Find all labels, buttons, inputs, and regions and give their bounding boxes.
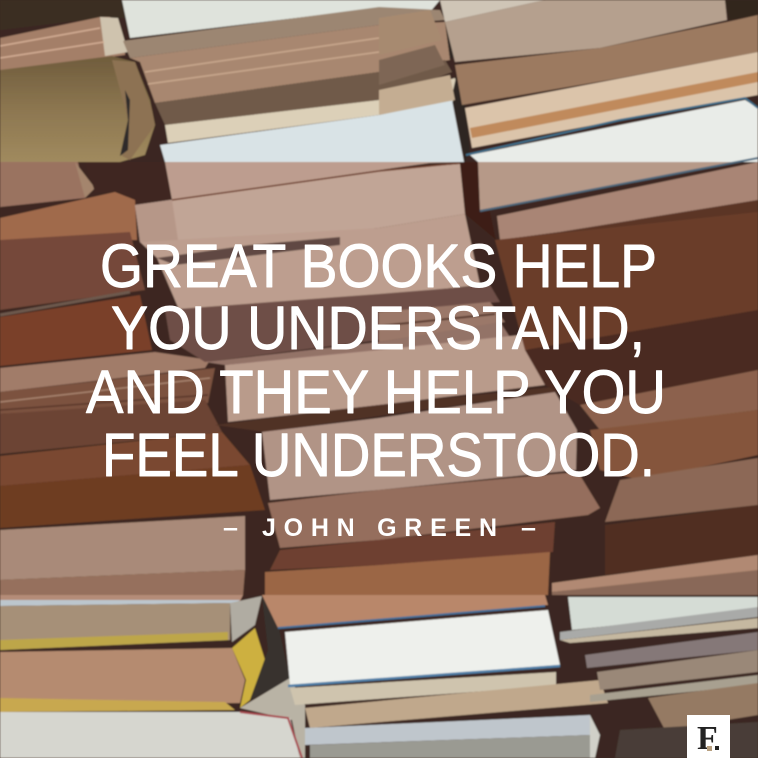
quote text	[86, 232, 666, 489]
top middle books	[122, 0, 470, 162]
attribution: JOHN GREEN	[262, 514, 497, 542]
attribution: –	[521, 514, 536, 542]
quote text: FEEL UNDERSTOOD.	[102, 421, 655, 489]
logo badge: F	[697, 720, 718, 757]
middle band left books	[0, 162, 265, 595]
middle band right books	[478, 158, 758, 595]
bottom left books	[0, 595, 305, 758]
top left books	[0, 0, 165, 162]
bottom right books	[560, 597, 758, 758]
quote text: YOU UNDERSTAND,	[111, 294, 645, 362]
tinted overlay band	[0, 162, 758, 595]
middle band centre books	[135, 162, 600, 595]
bottom centre books	[262, 595, 608, 758]
quote text: GREAT BOOKS HELP	[100, 232, 657, 300]
top right books	[440, 0, 758, 162]
logo badge	[687, 715, 730, 758]
quote text: AND THEY HELP YOU	[86, 358, 666, 426]
attribution: –	[223, 514, 238, 542]
